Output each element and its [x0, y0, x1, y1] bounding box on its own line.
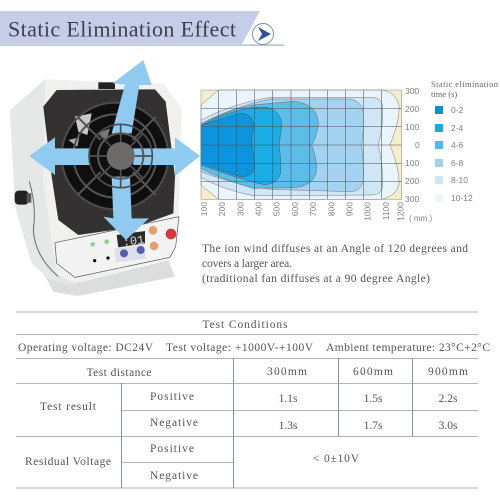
description text: covers a larger area.: [202, 258, 292, 270]
chart: y axis labels: 200: [405, 176, 419, 186]
table test result rows: 1.5s: [364, 393, 383, 405]
legend: 4-6: [451, 140, 464, 150]
legend: time (s): [431, 89, 457, 99]
control panel: [55, 217, 179, 277]
chart: y axis labels: 300: [405, 194, 419, 204]
arrow: up: [112, 60, 152, 133]
table test result rows: 1.7s: [364, 420, 383, 432]
device side face: [10, 79, 75, 285]
chart: x axis labels: ( mm ): [409, 214, 432, 223]
legend: 6-8: [451, 158, 464, 168]
icon: arrow circle: [252, 24, 274, 44]
chart: x axis labels: 700: [308, 202, 318, 216]
table residual voltage rows: Positive: [150, 443, 194, 455]
chart: y axis labels: 0: [415, 140, 420, 150]
device illustration with airflow arrows: [10, 60, 200, 296]
description text: (traditional fan diffuses at a 90 degree Angle): [202, 273, 430, 285]
fan housing: [43, 89, 175, 235]
legend: 8-10: [451, 175, 468, 185]
chart: x axis labels: 400: [254, 202, 264, 216]
chart: x axis labels: 800: [326, 202, 336, 216]
contour: 2-4 s: [201, 107, 282, 185]
legend: 0-2: [451, 105, 464, 115]
legend title: Static elimination: [431, 79, 499, 89]
table test result rows: Negative: [150, 417, 198, 429]
legend: [431, 79, 499, 203]
table header row: 600mm: [353, 366, 393, 378]
device front face: [43, 79, 182, 283]
heading banner: Static Elimination Effect: [8, 16, 236, 42]
chart: x axis labels: 100: [199, 202, 209, 216]
chart: x axis labels: 300: [236, 202, 246, 216]
chart: y axis labels: 100: [405, 158, 419, 168]
arrow: right: [133, 137, 200, 176]
table residual voltage rows: < 0±10V: [313, 453, 360, 465]
contour: 10-12 s: [201, 90, 399, 199]
table: test conditions: [16, 312, 490, 488]
table test result rows: Positive: [150, 391, 194, 403]
top clip: [98, 82, 115, 89]
table test result rows: [40, 391, 458, 432]
device stand: [40, 260, 175, 296]
legend: 10-12: [451, 193, 473, 203]
heading banner: [0, 11, 284, 46]
chart: y axis labels: [405, 86, 420, 204]
contour: 8-10 s: [201, 97, 383, 196]
table conditions row: Ambient temperature: 23°C+2°C: [326, 342, 490, 354]
chart: x axis labels: [199, 202, 432, 223]
table header row: 900mm: [428, 366, 468, 378]
table conditions row: Operating voltage: DC24V: [18, 342, 154, 354]
arrow: left: [29, 137, 90, 175]
contour: 0-2 s: [201, 113, 254, 177]
chart: x axis labels: 1100: [381, 202, 391, 220]
contour: 4-6 s: [201, 101, 318, 188]
control panel: :01: [122, 233, 145, 250]
chart: x axis labels: 1000: [362, 202, 372, 221]
description text: [202, 243, 468, 285]
chart: x axis labels: 900: [344, 202, 354, 216]
chart: y axis labels: 100: [405, 122, 419, 132]
chart: x axis labels: 600: [290, 202, 300, 216]
table header row: Test distance: [86, 367, 152, 379]
description text: The ion wind diffuses at an Angle of 120 degrees and: [202, 243, 468, 255]
chart: x axis labels: 1200: [396, 202, 406, 221]
table residual voltage rows: Negative: [150, 470, 198, 482]
chart: y axis labels: 300: [405, 86, 419, 96]
table conditions row: Test voltage: +1000V-+100V: [166, 342, 314, 354]
contour: 6-8 s: [201, 99, 363, 192]
knob: [15, 191, 31, 205]
table header row: [86, 366, 468, 379]
legend: 2-4: [451, 123, 464, 133]
side bracket curve: [29, 182, 58, 277]
chart: x axis labels: 500: [272, 202, 282, 216]
table test result rows: 2.2s: [439, 393, 458, 405]
table test result rows: 1.3s: [279, 420, 298, 432]
arrow: down: [103, 177, 149, 240]
fan inner guard and hub: [89, 124, 152, 188]
chart: x axis labels: 200: [217, 202, 227, 216]
table title: Test Conditions: [202, 319, 288, 331]
table conditions row: [18, 342, 490, 354]
table test result rows: 3.0s: [439, 420, 458, 432]
chart: static elimination contour map: [201, 90, 402, 199]
fan blades and outer guard: [62, 103, 168, 209]
table header row: 300mm: [267, 366, 307, 378]
table test result rows: Test result: [40, 401, 97, 413]
table test result rows: 1.1s: [279, 393, 298, 405]
table residual voltage rows: Residual Voltage: [25, 456, 111, 468]
table residual voltage rows: [25, 443, 360, 482]
chart: y axis labels: 200: [405, 104, 419, 114]
